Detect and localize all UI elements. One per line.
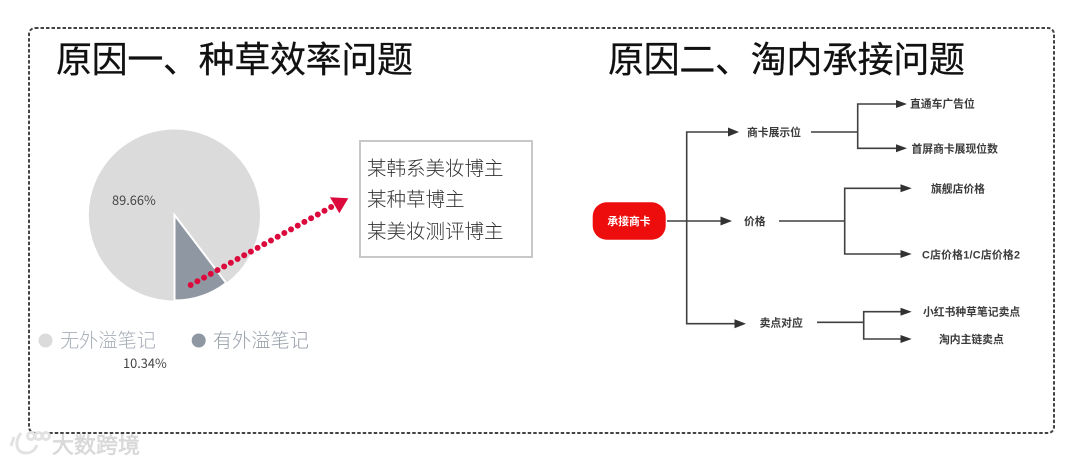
root node: 承接商卡 [607,214,651,228]
watermark: 大数跨境 [52,433,140,458]
callout: blogger list: 某种草博主 [367,189,465,211]
flow chart [593,96,1020,346]
node labels: 首屏商卡展现位数 [912,142,998,156]
node labels: 淘内主链卖点 [939,332,1004,346]
callout: blogger list: 某美妆测评博主 [367,221,504,243]
node labels: 卖点对应 [760,316,803,330]
heading: reason two: 原因二、淘内承接问题 [608,39,965,80]
node labels: C店价格1/C店价格2 [922,248,1020,262]
node labels: 价格 [744,214,766,228]
legend: 无外溢笔记 [60,330,156,352]
root node [593,202,666,240]
node labels: 小红书种草笔记卖点 [923,304,1020,318]
callout: blogger list [360,141,532,257]
legend [38,330,309,352]
node labels: 旗舰店价格 [931,182,985,196]
callout: blogger list: 某韩系美妆博主 [367,158,504,180]
arrow: dotted red [191,197,348,285]
pie chart [89,129,260,300]
label: 89.66%: 89.66% [112,190,156,209]
label: 10.34%: 10.34% [123,353,167,372]
legend: 有外溢笔记 [213,330,309,352]
heading: reason one: 原因一、种草效率问题 [56,39,413,80]
node labels: 商卡展示位 [747,125,801,139]
node labels [744,96,1020,346]
node labels: 直通车广告位 [910,96,975,110]
connectors [667,100,912,343]
watermark [11,432,140,458]
